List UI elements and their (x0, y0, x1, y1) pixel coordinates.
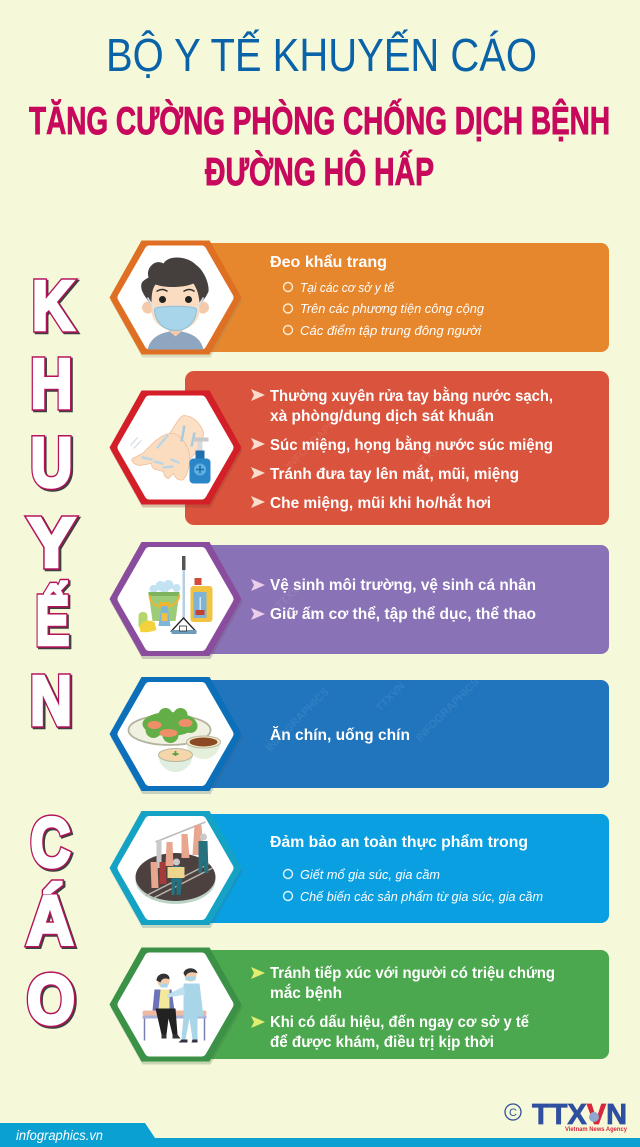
panel 1 heading: Đeo khẩu trang (270, 254, 387, 271)
vertical word: KHUYẾN CÁO: K (32, 266, 74, 344)
watermarks: INFOGRAPHICS (264, 686, 332, 754)
vertical word: KHUYẾN CÁO: Á (28, 883, 75, 961)
vertical word: KHUYẾN CÁO: U (30, 424, 72, 502)
panel 6 list (251, 965, 555, 1051)
panel: environment and body hygiene (200, 545, 609, 654)
vertical word: KHUYẾN CÁO: Y (28, 504, 75, 582)
panel 5 list (284, 868, 543, 904)
worker centre (168, 858, 184, 895)
worker right (198, 834, 208, 873)
panel 6 list: để được khám, điều trị kịp thời (270, 1034, 494, 1051)
panel 1 list: Tại các cơ sở y tế (300, 281, 395, 295)
vertical word: KHUYẾN CÁO: H (30, 344, 72, 422)
footer site label: infographics.vn (16, 1128, 103, 1143)
panel 1 list (284, 281, 484, 338)
panel 2 list (251, 387, 553, 512)
vertical word: KHUYẾN CÁO: U (32, 425, 74, 503)
panel 4 text: Ăn chín, uống chín (270, 727, 410, 744)
vertical word: KHUYẾN CÁO: O (28, 962, 76, 1040)
vertical word: KHUYẾN CÁO: C (32, 805, 72, 883)
hexagon icon: cleaning supplies (110, 542, 242, 659)
doctor (168, 968, 204, 1042)
panel 2 list: Súc miệng, họng bằng nước súc miệng (270, 436, 553, 454)
vertical word: KHUYẾN CÁO: Y (30, 505, 76, 583)
panel: avoid contact, seek care (200, 950, 609, 1059)
bench (142, 1010, 206, 1040)
vertical word: KHUYẾN CÁO: O (27, 960, 75, 1038)
logo: TTXVN (505, 1099, 628, 1133)
soap bottle (190, 438, 210, 484)
vertical word: KHUYẾN CÁO: H (32, 346, 74, 424)
soup bowl (158, 748, 192, 772)
patient (152, 974, 180, 1038)
panel 3 list (251, 577, 536, 623)
watermarks (264, 404, 482, 754)
vertical word: KHUYẾN CÁO: H (30, 344, 72, 422)
panel 5 list: Chế biến các sản phẩm từ gia súc, gia cầm (300, 890, 543, 904)
panel: wear masks (200, 243, 609, 352)
vertical word: KHUYẾN CÁO: K (32, 266, 74, 344)
panel 6 list: Khi có dấu hiệu, đến ngay cơ sở y tế (270, 1014, 529, 1031)
panel: eat cooked food (200, 680, 609, 788)
vertical word: KHUYẾN CÁO: Ế (36, 582, 70, 660)
title line: ministry: BỘ Y TẾ KHUYẾN CÁO (106, 29, 537, 81)
panel 2 list: Thường xuyên rửa tay bằng nước sạch, (270, 387, 553, 405)
hexagon icon: hand washing (110, 390, 242, 508)
panel 2 list: xà phòng/dung dịch sát khuẩn (270, 408, 494, 425)
hexagon icon: doctor and patient (110, 948, 242, 1064)
panel: food safety (200, 814, 609, 923)
panel 6 list: mắc bệnh (270, 984, 342, 1002)
panel: hand hygiene (185, 371, 609, 525)
vertical word: KHUYẾN CÁO: C (30, 804, 70, 882)
vertical word: KHUYẾN CÁO: U (30, 424, 72, 502)
watermarks: TTXVN (374, 680, 408, 714)
panel 1 list: Các điểm tập trung đông người (300, 324, 482, 338)
logo wordmark: TTXVN (532, 1099, 627, 1131)
panel 5 heading: Đảm bảo an toàn thực phẩm trong (270, 834, 528, 851)
vertical word: KHUYẾN CÁO: Á (26, 882, 74, 960)
panel 1 list: Trên các phương tiện công cộng (300, 302, 484, 316)
watermarks: TTXVN (414, 438, 448, 472)
panel 6 list: Tránh tiếp xúc với người có triệu chứng (270, 965, 555, 982)
footer band (0, 1123, 640, 1147)
vertical word: KHUYẾN CÁO: O (27, 960, 75, 1038)
vertical word: KHUYẾN CÁO: Ế (37, 583, 71, 661)
copyright symbol: C (509, 1107, 517, 1119)
vertical word: KHUYẾN CÁO: Á (26, 882, 74, 960)
vertical word: KHUYẾN CÁO: C (30, 804, 70, 882)
watermarks: INFOGRAPHICS (414, 676, 482, 744)
sauce bowl (186, 736, 220, 759)
hexagon icon: cooked meal (110, 677, 242, 794)
logo globe (589, 1112, 599, 1122)
logo tagline: Vietnam News Agency (565, 1127, 628, 1133)
vertical word: KHUYẾN CÁO: N (30, 662, 72, 740)
vertical word: KHUYẾN CÁO: Ế (36, 582, 70, 660)
vertical word: KHUYẾN CÁO: N (32, 663, 74, 741)
vertical word: KHUYẾN CÁO: Y (28, 504, 75, 582)
panel 2 list: Tránh đưa tay lên mắt, mũi, miệng (270, 465, 519, 483)
hexagon icon: man wearing mask (110, 240, 242, 358)
watermarks: INFOGRAPHICS (284, 404, 352, 472)
vertical word: KHUYẾN CÁO (26, 266, 76, 1040)
watermarks: TTXVN (274, 578, 308, 612)
vertical word: KHUYẾN CÁO: N (30, 662, 72, 740)
panel 3 list: Giữ ấm cơ thể, tập thể dục, thể thao (270, 606, 536, 623)
hexagon icon: slaughter line (110, 811, 242, 928)
panel 5 list: Giết mổ gia súc, gia cầm (300, 868, 440, 882)
vertical word: KHUYẾN CÁO: K (34, 268, 76, 346)
title block (29, 29, 610, 194)
subtitle line 2: ĐƯỜNG HÔ HẤP (205, 149, 434, 194)
panel 2 list: Che miệng, mũi khi ho/hắt hơi (270, 494, 491, 512)
panel 3 list: Vệ sinh môi trường, vệ sinh cá nhân (270, 577, 536, 594)
